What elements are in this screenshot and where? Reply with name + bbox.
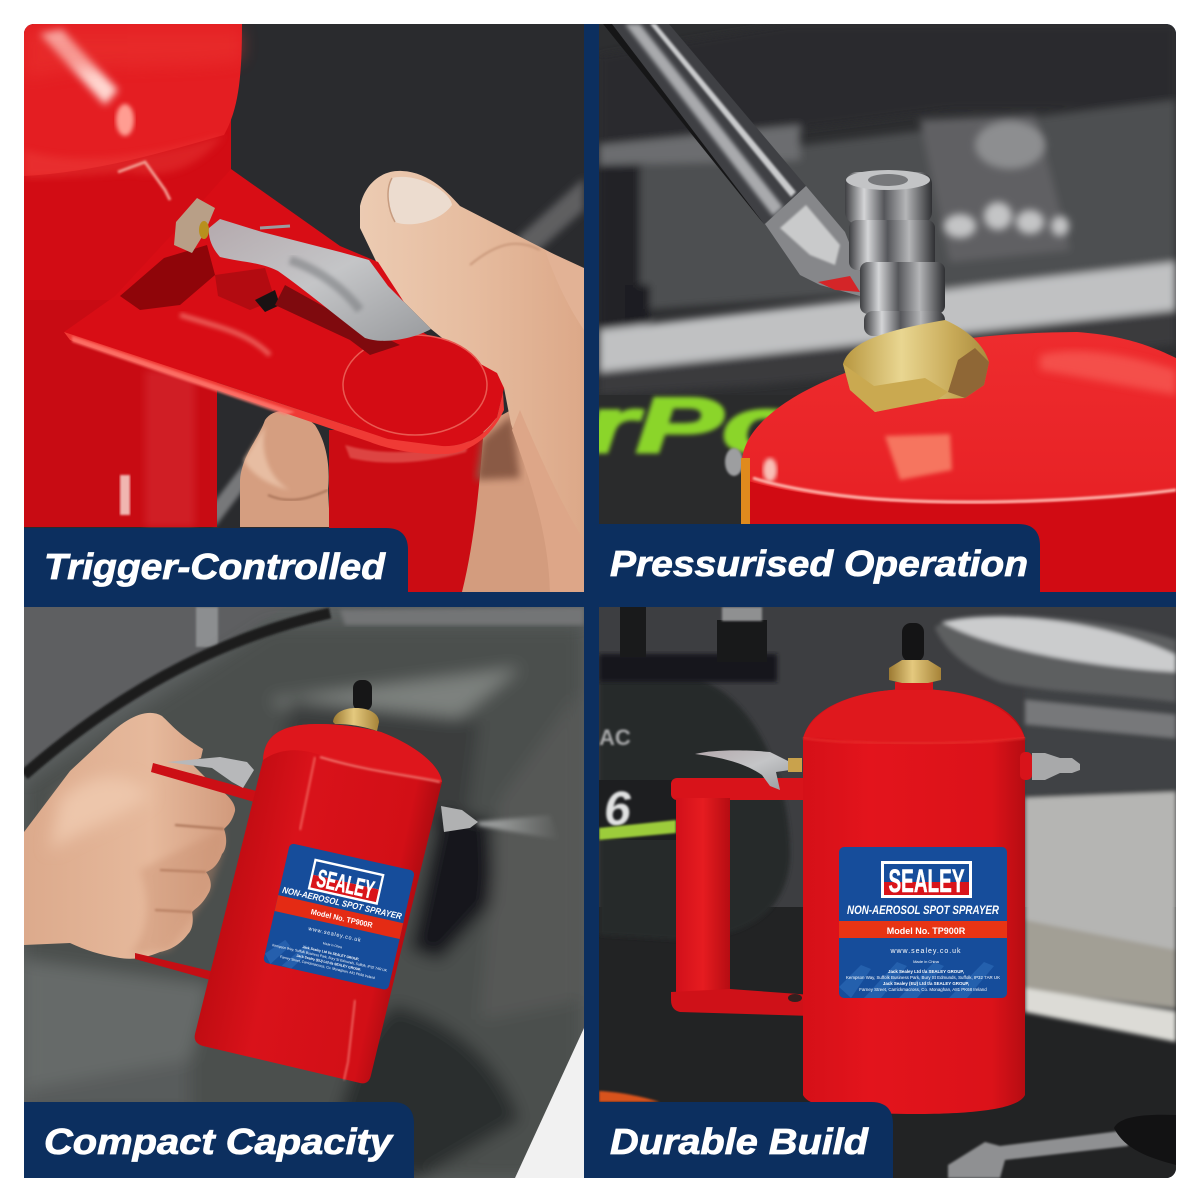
product label, tilted: Jack Sealey Ltd t/a SEALEY GROUP,: [302, 945, 360, 962]
lower finger: [240, 411, 330, 527]
blurred machine background: rPo: [586, 381, 801, 469]
red sprayer body: [803, 682, 1025, 1114]
car windscreen background: [24, 607, 584, 1178]
product label: [839, 847, 1007, 998]
product label, tilted: SEALEY: [314, 865, 377, 905]
panel: compact capacity photo: [24, 607, 584, 1178]
product label: Jack Sealey Ltd t/a SEALEY GROUP,: [888, 969, 964, 974]
red handle cylinder: [329, 430, 484, 592]
product label, tilted: [263, 843, 415, 990]
product label: Made in China: [913, 959, 940, 964]
product label: Kempson Way, Suffolk Business Park, Bury St Edmunds, Suffolk, IP32 7AR UK: [846, 975, 1000, 980]
caption: Trigger-Controlled: [24, 528, 408, 605]
caption: Trigger-Controlled: Trigger-Controlled: [44, 546, 386, 587]
spray mist: [475, 816, 551, 837]
panel: durable build photo: [599, 607, 1176, 1178]
air blow gun on bench: [948, 1115, 1176, 1178]
chrome air tube: [603, 24, 806, 224]
caption: Compact Capacity: [24, 1102, 414, 1178]
caption: Durable Build: Durable Build: [610, 1121, 869, 1162]
dark workshop background: [24, 24, 584, 528]
black compressor: 6: [604, 783, 631, 836]
nozzle: [441, 806, 478, 832]
caption: Pressurised Operation: [585, 524, 1040, 605]
brass valve nut: [843, 320, 989, 412]
sprayer handle: [671, 778, 812, 1016]
product label: Model No. TP900R: [887, 926, 966, 936]
red tank dome: [741, 332, 1176, 592]
hand and thumb: [360, 171, 584, 592]
white blurred marking dots: [944, 121, 1069, 238]
product label, tilted: www.sealey.co.uk: [307, 926, 362, 944]
dark workshop background: [599, 607, 1176, 1178]
black compressor: AC: [599, 725, 631, 750]
panel: trigger-controlled photo: [24, 24, 584, 592]
brass fitting: [174, 198, 215, 253]
product label: NON-AEROSOL SPOT SPRAYER: [847, 905, 1000, 917]
caption: Durable Build: [585, 1102, 893, 1178]
upper trigger and handle: [135, 757, 256, 980]
product label: SEALEY: [888, 863, 964, 899]
product label, tilted: Kempson Way, Suffolk Business Park, Bury St Edmunds, Suffolk, IP32 7AR UK: [272, 943, 388, 973]
red bracket plate: [64, 169, 504, 454]
valve cap: [333, 680, 379, 731]
silver trigger: [695, 750, 802, 790]
panel: pressurised operation photo: [586, 24, 1176, 592]
product label: Farney Street, Carrickmacross, Co. Monaghan, A81 PK68 Ireland: [859, 987, 987, 992]
silver wheel: [935, 616, 1176, 1042]
caption: Compact Capacity: Compact Capacity: [44, 1121, 394, 1162]
product label, tilted: Model No. TP900R: [310, 907, 374, 930]
blurred machine background: [599, 24, 1176, 524]
product label: www.sealey.co.uk: [889, 948, 962, 955]
product label, tilted: Farney Street, Carrickmacross, Co. Monaghan, A81 PK68 Ireland: [280, 955, 375, 980]
product label: Jack Sealey (EU) Ltd t/a SEALEY GROUP,: [883, 981, 969, 986]
hand: [24, 713, 235, 959]
chrome coupler head: [765, 170, 945, 336]
valve cap: [889, 623, 941, 683]
product label, tilted: Jack Sealey (EU) Ltd t/a SEALEY GROUP,: [296, 953, 361, 972]
nozzle: [1020, 752, 1080, 780]
product label, tilted: Made in China: [323, 941, 343, 949]
caption: Pressurised Operation: Pressurised Operation: [610, 543, 1028, 584]
red tank body: [24, 24, 242, 527]
product label, tilted: NON-AEROSOL SPOT SPRAYER: [281, 885, 403, 922]
red sprayer body: [195, 724, 442, 1083]
silver trigger: [209, 219, 431, 341]
black compressor: [599, 607, 790, 940]
